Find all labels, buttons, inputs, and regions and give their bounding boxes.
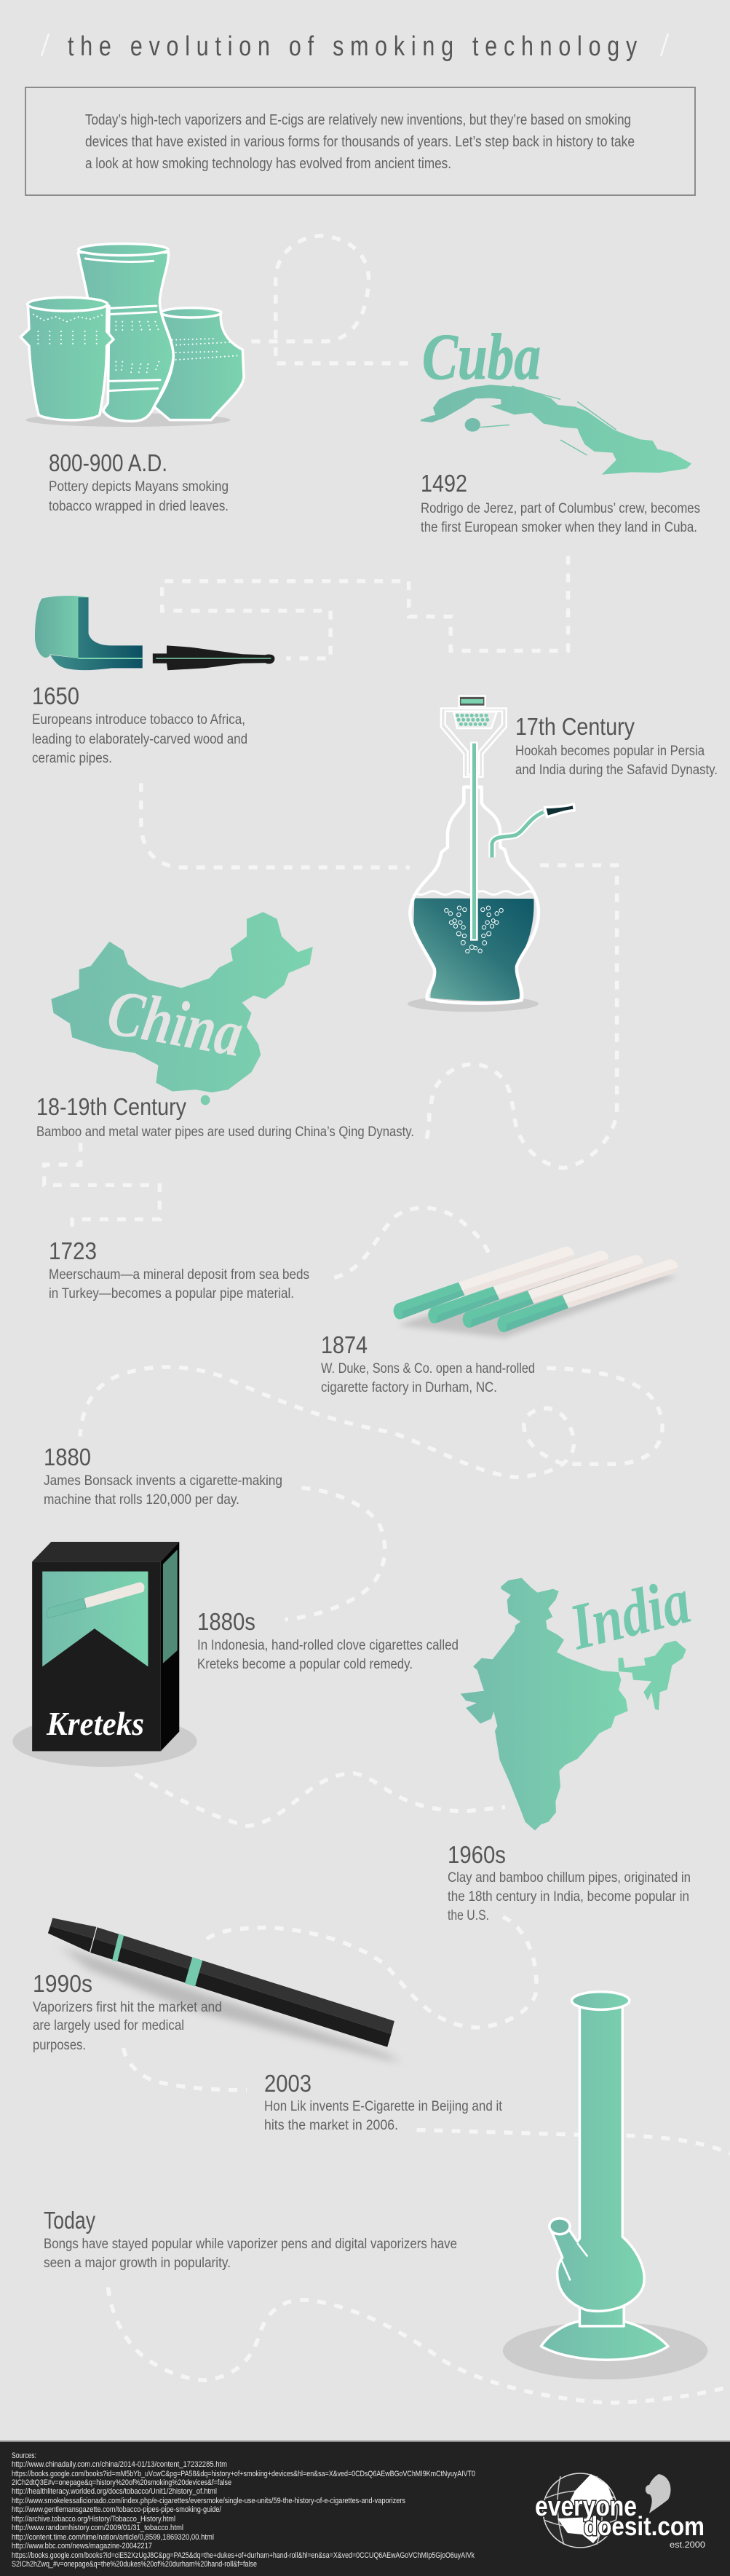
icon: vape pen — [48, 1918, 400, 2063]
dashed timeline path: Today to right edge — [108, 2287, 730, 2403]
sources list: http://healthliteracy.worlded.org/docs/tobacco/Unit1/2history_of.html — [12, 2487, 217, 2496]
text block: 1723: in Turkey—becomes a popular pipe material. — [49, 1286, 294, 1301]
text block: 17th Century — [515, 713, 718, 778]
dashed timeline path: 1723 to cigarettes — [334, 1208, 489, 1277]
text block: 800-900 A.D. — [49, 449, 229, 514]
text block: 1492: the first European smoker when they land in Cuba. — [421, 520, 697, 535]
icon: tobacco pipe — [35, 596, 274, 670]
text block: 1492 — [421, 470, 700, 535]
icon: Cuba map — [420, 385, 691, 475]
heading: China: China — [103, 976, 248, 1071]
text block: 1960s: the U.S. — [448, 1908, 489, 1923]
dashed timeline path: Cuba to pipe — [162, 556, 568, 658]
icon: India map — [461, 1578, 686, 1830]
dashed timeline path: pipe to hookah — [141, 783, 410, 867]
text block: 1880: machine that rolls 120,000 per day. — [44, 1492, 239, 1508]
sources list: http://www.bbc.com/news/magazine-20042217 — [12, 2542, 152, 2551]
text block: 1880s: In Indonesia, hand-rolled clove cigarettes called — [197, 1638, 459, 1653]
sources list: https://books.google.com/books?id=mM5bYb_uVcwC&pg=PA58&dq=history+of+smoking+devices&hl=en&sa=X&ved=0CDsQ6AEwBGoVChMI9KmCtNyuyAIVT0 — [12, 2470, 475, 2478]
text block: 1650: Europeans introduce tobacco to Africa, — [32, 712, 245, 728]
text block: Today: Bongs have stayed popular while vaporizer pens and digital vaporizers have — [44, 2237, 457, 2252]
text block: 1492: 1492 — [421, 470, 467, 497]
text block: 1880 — [44, 1443, 282, 1508]
dashed timeline path: Kreteks to India — [135, 1773, 505, 1826]
sources list: http://www.gentlemansgazette.com/tobacco-pipes-pipe-smoking-guide/ — [12, 2505, 222, 2514]
text block: 1723 — [49, 1237, 309, 1301]
dashed timeline path: hookah to China — [426, 865, 617, 1168]
sources list: Sources: — [12, 2451, 36, 2460]
text block: 800-900 A.D.: tobacco wrapped in dried leaves. — [49, 499, 229, 514]
logo: everyonedoesit.com: everyone — [535, 2492, 637, 2522]
text block: 18-19th Century: 18-19th Century — [36, 1093, 186, 1120]
dashed timeline path: 1874 to 1880 — [80, 1367, 662, 1477]
text block: Today — [44, 2207, 457, 2271]
icon: Kreteks cigarette pack — [12, 1542, 197, 1767]
sources list: http://www.chinadaily.com.cn/china/2014-01/13/content_17232285.htm — [12, 2460, 227, 2469]
label: Kreteks: Kreteks — [46, 1705, 144, 1742]
text block: 1990s: 1990s — [33, 1970, 92, 1997]
sources list: S2ICh2hZwq_#v=onepage&q=the%20dukes%20of%20durham%20hand-roll&f=false — [12, 2560, 257, 2569]
sources list: http://content.time.com/time/nation/article/0,8599,1869320,00.html — [12, 2533, 214, 2542]
dashed timeline path: 2003 to right edge — [417, 2130, 730, 2154]
sources list: http://www.smokelessaficionado.com/index.php/e-cigarettes/eversmoke/single-use-units/59-the-history-of-e-cigarettes-and-vaporizers — [12, 2497, 405, 2505]
text block: 17th Century: Hookah becomes popular in Persia — [515, 744, 705, 759]
text block: 1960s: Clay and bamboo chillum pipes, originated in — [448, 1870, 691, 1886]
text block: 1990s — [33, 1970, 222, 2053]
text block: 1960s: 1960s — [448, 1841, 506, 1868]
text block: 1880: James Bonsack invents a cigarette-making — [44, 1473, 282, 1489]
dashed timeline path: 1960s to vape pen — [201, 1917, 536, 2028]
icon: hookah — [408, 696, 574, 1012]
intro box: Today’s high-tech vaporizers and E-cigs are relatively new inventions, but they’re based on smoking — [85, 112, 631, 128]
text block: 1650: leading to elaborately-carved wood and — [32, 732, 247, 747]
footer panel — [0, 2441, 730, 2576]
dashed timeline path: pottery to Cuba — [251, 236, 410, 363]
logo: everyonedoesit.com: doesit.com — [584, 2511, 705, 2541]
icon: four cigarettes — [394, 1247, 678, 1338]
dashed timeline path: China to 1723 — [44, 1143, 159, 1229]
text block: Today: seen a major growth in popularity. — [44, 2256, 231, 2271]
sources list: http://archive.tobacco.org/History/Tobacco_History.html — [12, 2515, 175, 2524]
sources list: https://books.google.com/books?id=ciE52XzUgJ8C&pg=PA25&dq=the+dukes+of+durham+hand-roll&hl=en&sa=X&ved=0CCUQ6AEwAGoVChMIp5GjoO6uyAIVk — [12, 2551, 475, 2560]
text block: 1990s: purposes. — [33, 2038, 86, 2053]
text block: 1650 — [32, 682, 247, 766]
heading: India: India — [563, 1564, 697, 1664]
text block: 1960s — [448, 1841, 691, 1923]
text block: 1880: 1880 — [44, 1443, 91, 1470]
text block: 800-900 A.D.: 800-900 A.D. — [49, 449, 167, 476]
text block: 1960s: the 18th century in India, become popular in — [448, 1889, 689, 1905]
icon: bong — [503, 1992, 707, 2379]
text block: 1880s — [197, 1608, 459, 1672]
text block: 800-900 A.D.: Pottery depicts Mayans smoking — [49, 479, 229, 495]
text block: 2003: Hon Lik invents E-Cigarette in Beijing and it — [264, 2099, 503, 2114]
text block: 1880s: 1880s — [197, 1608, 255, 1635]
text block: 2003: 2003 — [264, 2070, 312, 2097]
sources list — [12, 2451, 475, 2569]
intro box — [25, 87, 695, 195]
text block: 1990s: Vaporizers first hit the market and — [33, 2000, 222, 2015]
text block: 1723: 1723 — [49, 1237, 97, 1264]
dashed timeline path: 1880 to 1880s — [285, 1488, 385, 1620]
text block: 2003: hits the market in 2006. — [264, 2118, 398, 2133]
text block: 18-19th Century — [36, 1093, 414, 1140]
text block: 1880s: Kreteks become a popular cold remedy. — [197, 1657, 413, 1672]
text block: 1650: 1650 — [32, 682, 79, 709]
text block: 2003 — [264, 2070, 503, 2133]
dashed timeline path: 1990s to 2003 — [124, 2048, 247, 2090]
sources list: 2ICh2dtQ3E#v=onepage&q=history%20of%20smoking%20devices&f=false — [12, 2478, 231, 2487]
text block: 1874: W. Duke, Sons & Co. open a hand-rolled — [321, 1361, 535, 1376]
logo: everyonedoesit.com: est.2000 — [670, 2540, 705, 2550]
text block: 1990s: are largely used for medical — [33, 2018, 184, 2033]
icon: Mayan pottery — [20, 244, 244, 427]
icon: China map — [51, 912, 313, 1105]
text block: 1874: cigarette factory in Durham, NC. — [321, 1380, 497, 1395]
text block: Today: Today — [44, 2207, 95, 2234]
text block: 18-19th Century: Bamboo and metal water pipes are used during China’s Qing Dynasty. — [36, 1124, 414, 1140]
heading: Cuba: Cuba — [422, 321, 541, 393]
text block: 17th Century: 17th Century — [515, 713, 635, 740]
text block: 1650: ceramic pipes. — [32, 751, 112, 766]
intro box: a look at how smoking technology has evolved from ancient times. — [85, 156, 451, 172]
text block: 1874: 1874 — [321, 1331, 368, 1358]
text block: 1723: Meerschaum—a mineral deposit from sea beds — [49, 1267, 309, 1283]
intro box: devices that have existed in various forms for thousands of years. Let’s step back in history to take — [85, 134, 635, 150]
logo: everyonedoesit.com — [535, 2473, 705, 2550]
text block: 1492: Rodrigo de Jerez, part of Columbus’ crew, becomes — [421, 501, 700, 516]
sources list: http://www.randomhistory.com/2009/01/31_tobacco.html — [12, 2524, 183, 2532]
text block: 1874 — [321, 1331, 535, 1395]
